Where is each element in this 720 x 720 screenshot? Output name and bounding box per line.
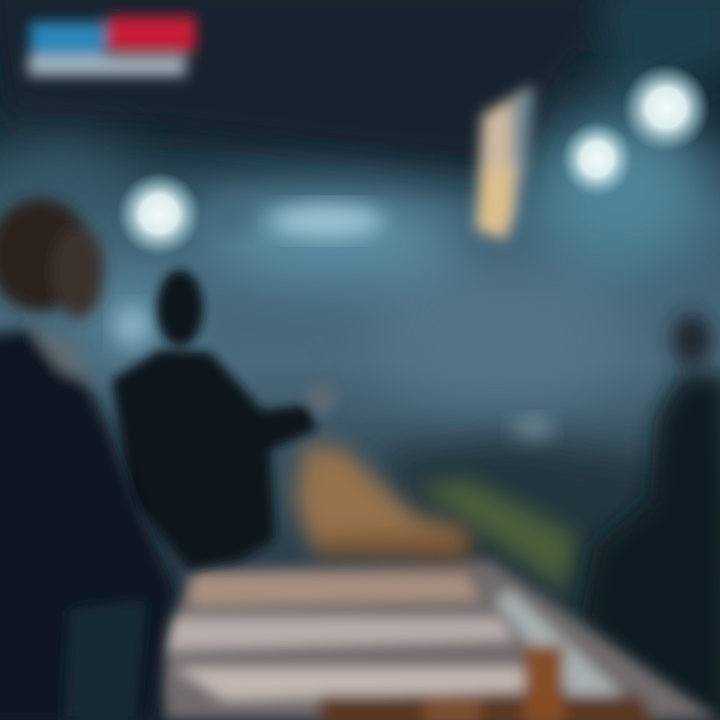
dark stadium roof (0, 0, 720, 170)
left foreground man (0, 199, 175, 720)
dark lower stands (380, 440, 720, 720)
green pitch (415, 480, 575, 590)
hanging flag (476, 86, 534, 240)
centre silhouette man (112, 270, 338, 570)
table with food and drinks (158, 560, 720, 720)
food pile (295, 445, 470, 560)
floodlights (114, 64, 710, 446)
right seated figure (580, 314, 720, 720)
stadium light haze (0, 110, 710, 410)
logo: red and blue banner (28, 16, 196, 76)
